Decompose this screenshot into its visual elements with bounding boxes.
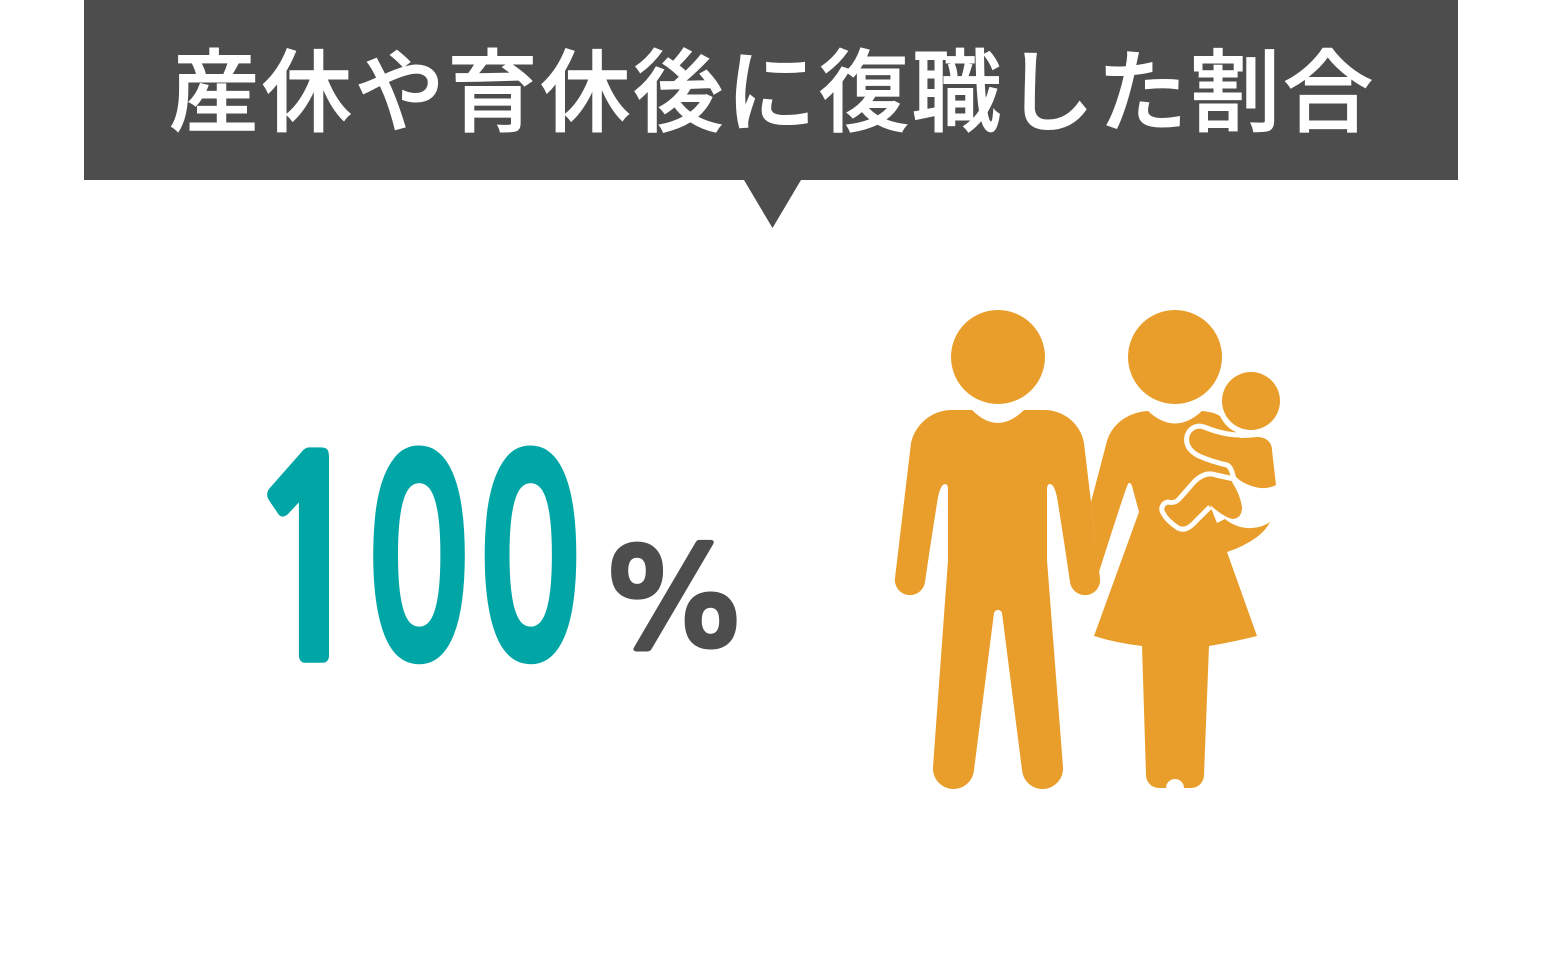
icon: man silhouette — [895, 410, 1100, 789]
percent sign: % — [596, 534, 752, 668]
digit 1: 1 — [242, 429, 376, 700]
icon: baby outline — [1162, 426, 1240, 529]
title banner — [84, 0, 1458, 228]
statistic: 100% — [242, 429, 752, 700]
icon: woman silhouette — [1091, 411, 1276, 788]
digit 0: 0 — [478, 430, 582, 700]
icon: man head — [951, 310, 1045, 404]
icon: woman head — [1128, 310, 1222, 404]
digit 0: 0 — [366, 430, 471, 700]
title: 産休や育休後に復職した割合 — [169, 44, 1373, 144]
icon: family — [895, 310, 1280, 789]
icon: baby head — [1222, 372, 1280, 430]
